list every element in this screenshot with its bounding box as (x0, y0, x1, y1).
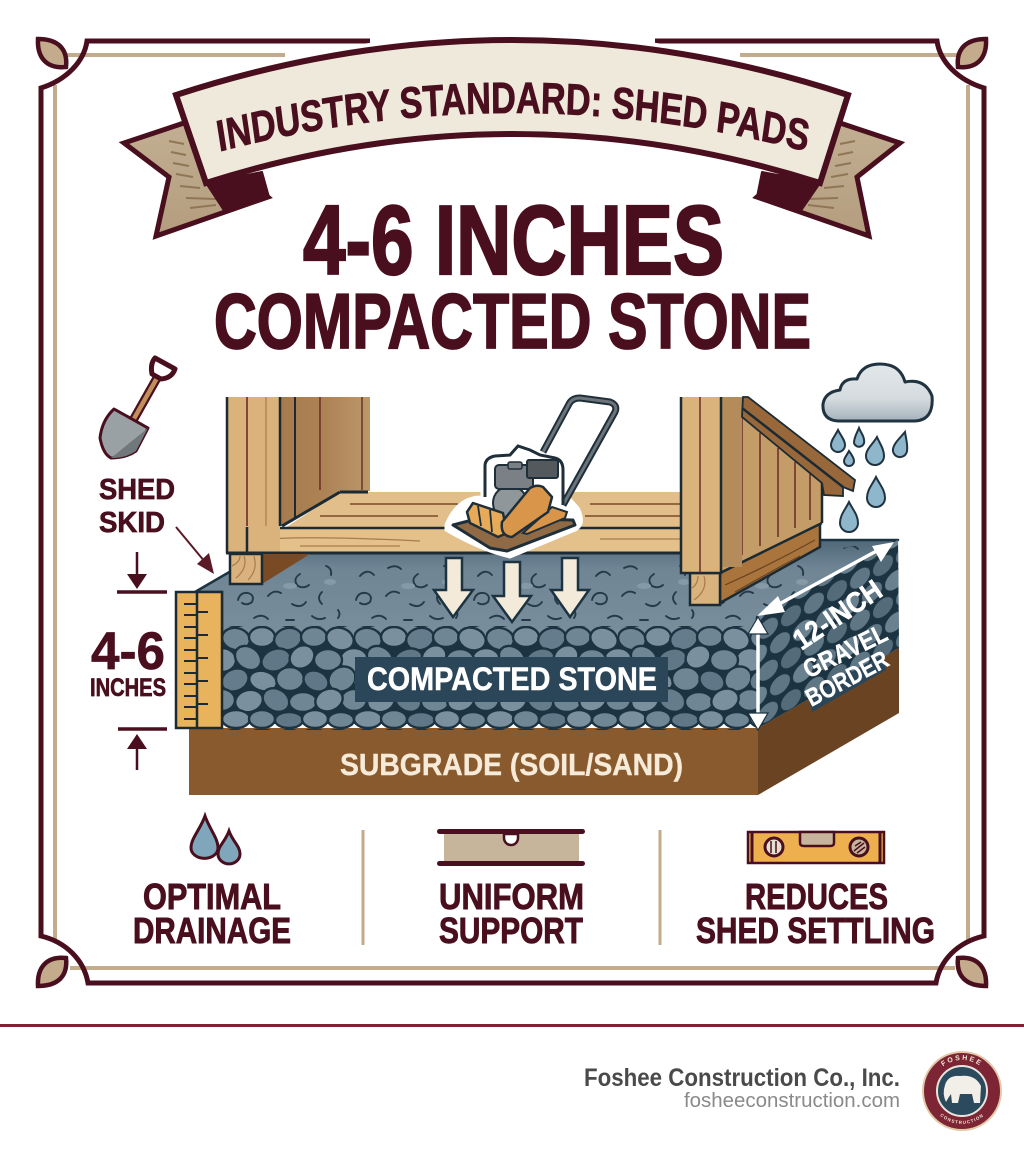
subgrade layer (189, 648, 899, 795)
label: 4-6 inches: INCHES (90, 674, 166, 702)
main heading: 4-6 INCHES (303, 185, 724, 295)
label: 12-inch gravel border: 12-INCH (788, 574, 888, 657)
gravel front stones (222, 636, 758, 724)
text: optimal drainage (133, 876, 291, 951)
left wall inner (280, 397, 370, 526)
compactor handle (543, 398, 616, 505)
left wall front (226, 397, 280, 553)
subgrade label: SUBGRADE (SOIL/SAND) (340, 747, 683, 782)
text: uniform support: UNIFORM (439, 876, 584, 917)
footer company text: Foshee Construction Co., Inc. (584, 1064, 900, 1092)
arrow: shed skid pointer (176, 527, 214, 574)
compactor engine (493, 486, 527, 520)
icon: water drops (191, 816, 240, 864)
compactor base plate (453, 518, 575, 551)
shed left section (226, 397, 690, 584)
logo: FOSHEE (940, 1055, 982, 1066)
label: 12-inch gravel border: BORDER (801, 645, 894, 712)
raindrops (831, 428, 907, 532)
logo elephant (944, 1076, 981, 1103)
arrow: gravel height (748, 617, 768, 730)
label: shed skid: SKID (99, 507, 165, 539)
footer company text (584, 1064, 900, 1112)
left skid (262, 554, 310, 584)
roof (742, 397, 855, 496)
text: reduces shed settling: SHED SETTLING (696, 910, 935, 951)
shed floor (282, 492, 690, 530)
gravel layer (195, 530, 901, 730)
text: reduces shed settling (696, 876, 935, 951)
icon: plate compactor (446, 398, 616, 557)
icon: spirit level (748, 832, 884, 863)
right wall side (720, 397, 822, 573)
front beam (248, 528, 688, 552)
shed right section (681, 397, 855, 605)
banner left tail (124, 123, 268, 236)
banner folds (206, 172, 820, 212)
depth measure arrows (117, 552, 167, 770)
logo: CONSTRUCTION (940, 1114, 983, 1124)
icon: level support (437, 829, 585, 866)
compactor body (523, 507, 567, 534)
decorative frame (38, 39, 986, 986)
label: 12-inch gravel border (788, 574, 894, 712)
arrow: gravel border width (757, 542, 894, 616)
compactor halo (446, 442, 581, 557)
text: uniform support (439, 876, 584, 951)
compactor shroud (485, 446, 563, 505)
right skid (720, 523, 820, 603)
logo (922, 1051, 1002, 1131)
label: shed skid (99, 474, 175, 539)
dividers (363, 830, 660, 945)
main heading (214, 185, 811, 365)
label: shed skid: SHED (99, 474, 175, 506)
text: reduces shed settling: REDUCES (745, 876, 888, 917)
ruler (176, 592, 222, 728)
label: compacted stone: COMPACTED STONE (367, 661, 657, 697)
icon: shovel (100, 358, 175, 458)
banner (118, 37, 906, 240)
benefit: optimal drainage (133, 816, 291, 951)
icon: rain cloud (823, 364, 932, 532)
footer rule (0, 1024, 1024, 1027)
text: uniform support: SUPPORT (439, 910, 583, 951)
label: 12-inch gravel border: GRAVEL (798, 618, 892, 684)
text: optimal drainage: DRAINAGE (133, 910, 291, 951)
footer company text: fosheeconstruction.com (684, 1090, 900, 1112)
benefit: uniform support (437, 829, 585, 951)
main heading: COMPACTED STONE (214, 277, 811, 365)
label: 4-6 inches: 4-6 (91, 622, 165, 681)
banner right tail (757, 123, 900, 236)
benefit: reduces shed settling (696, 832, 935, 951)
text: optimal drainage: OPTIMAL (143, 876, 281, 917)
compaction arrows (434, 558, 589, 622)
gravel side face (757, 540, 899, 728)
banner title: INDUSTRY STANDARD: SHED PADS (216, 82, 809, 152)
gravel top surface (195, 540, 898, 640)
right wall front (681, 397, 722, 573)
banner body (176, 40, 848, 183)
